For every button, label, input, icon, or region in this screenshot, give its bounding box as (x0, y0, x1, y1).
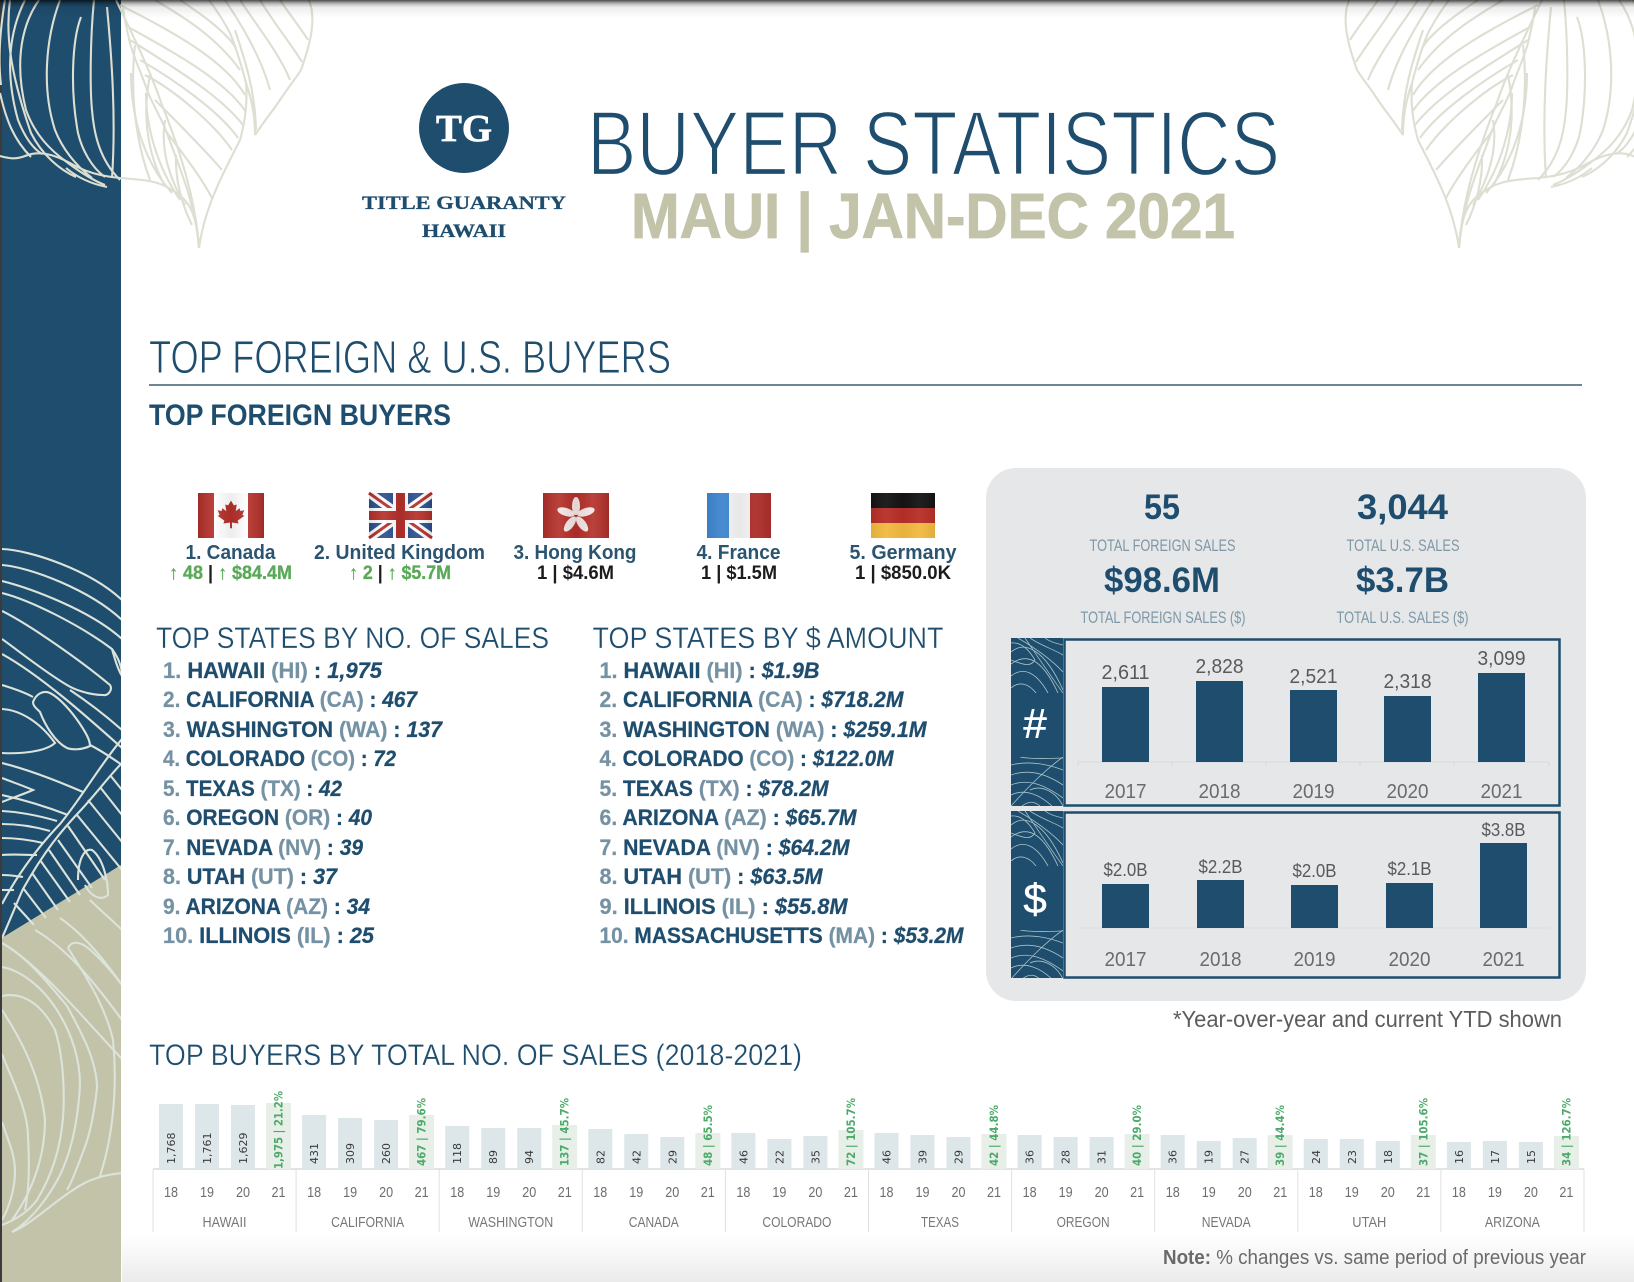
group: Canada: 19 (629, 1184, 643, 1201)
group: Colorado: 19 (772, 1184, 786, 1201)
group: Texas: 21 (987, 1184, 1001, 1201)
chart: number of sales by year: 2,521 (1290, 666, 1338, 688)
group: Utah: 21 (1416, 1184, 1430, 1201)
group: Colorado (725, 1098, 863, 1232)
chart: dollar volume by year: 2019 (1294, 949, 1336, 971)
group: Utah: 20 (1381, 1184, 1395, 1201)
chart: dollar volume by year: $2.0B (1104, 860, 1148, 880)
chart: dollar volume by year: $2.2B (1198, 857, 1242, 877)
flag: United Kingdom (369, 493, 432, 538)
group: Canada: 48 | 65.5% (701, 1105, 715, 1166)
group: California: 467 | 79.6% (415, 1098, 429, 1166)
group: Utah: 24 (1310, 1150, 1323, 1164)
group: Washington: 19 (486, 1184, 500, 1201)
group: Texas: 42 | 44.8% (987, 1105, 1001, 1166)
group: California: 431 (308, 1143, 321, 1164)
group: Arizona: 19 (1488, 1184, 1502, 1201)
list: top states by number of sales: 3. WASHINGTON (WA) : 137 (163, 717, 444, 742)
totals: TOTAL FOREIGN SALES (1090, 537, 1236, 555)
group: Utah: 19 (1345, 1184, 1359, 1201)
group: Nevada: 20 (1238, 1184, 1252, 1201)
chart: number of sales by year: 3,099 (1478, 648, 1526, 670)
group: Utah (1298, 1098, 1436, 1232)
chart: dollar volume by year: $2.1B (1388, 859, 1432, 879)
foreign buyer labels: 3. Hong Kong (514, 542, 636, 564)
group: Washington: 118 (451, 1143, 464, 1164)
group: Oregon: 28 (1060, 1150, 1073, 1164)
group: Texas (868, 1105, 1006, 1232)
group: Hawaii: 1,761 (201, 1132, 214, 1164)
group: Canada: 29 (666, 1150, 679, 1164)
list: top states by number of sales: 5. TEXAS (TX) : 42 (163, 776, 343, 801)
totals: TOTAL U.S. SALES ($) (1336, 609, 1468, 627)
totals: 55 (1144, 488, 1180, 527)
foreign buyer labels: ↑ 48 | ↑ $84.4M (169, 563, 292, 584)
group: Washington: 20 (522, 1184, 536, 1201)
list: top states by dollar amount: 6. ARIZONA (AZ) : $65.7M (600, 805, 857, 830)
chart: dollar volume by year (1011, 811, 1560, 979)
chart: dollar volume by year: $ (1023, 875, 1047, 922)
list: top states by number of sales: 8. UTAH (UT) : 37 (163, 864, 339, 889)
chart: dollar volume by year: 2020 (1388, 949, 1430, 971)
chart: number of sales by year: 2017 (1104, 781, 1146, 803)
list: top states by dollar amount: 3. WASHINGTON (WA) : $259.1M (600, 717, 927, 742)
group: Oregon: 31 (1096, 1150, 1109, 1164)
list: top states by number of sales: 9. ARIZONA (AZ) : 34 (163, 894, 370, 919)
group: Nevada (1155, 1105, 1293, 1232)
chart: number of sales by year: 2021 (1480, 781, 1522, 803)
group: Nevada: NEVADA (1202, 1214, 1251, 1231)
footnote: year over year: *Year-over-year and current YTD shown (1173, 1006, 1562, 1032)
group: Colorado: 18 (736, 1184, 750, 1201)
flag: France (707, 493, 771, 538)
group: Texas: 19 (916, 1184, 930, 1201)
group: Nevada: 21 (1273, 1184, 1287, 1201)
sidebar leaf art (2, 549, 122, 1232)
group: California: 309 (344, 1143, 357, 1164)
logo (362, 83, 566, 242)
foreign buyer labels: 5. Germany (850, 542, 957, 564)
group: Oregon: 36 (1024, 1150, 1037, 1164)
totals: 3,044 (1357, 488, 1449, 527)
group: Hawaii: 1,629 (237, 1132, 250, 1164)
list: top states by number of sales: 10. ILLINOIS (IL) : 25 (163, 923, 375, 948)
bottom fade (122, 1235, 1634, 1282)
group: California: CALIFORNIA (331, 1214, 404, 1231)
logo: TITLE GUARANTY (362, 193, 566, 214)
chart: number of sales by year: 2018 (1198, 781, 1240, 803)
group: Colorado: 35 (809, 1150, 822, 1164)
group: Nevada: 18 (1166, 1184, 1180, 1201)
group: Texas: 18 (880, 1184, 894, 1201)
totals: TOTAL FOREIGN SALES ($) (1080, 609, 1246, 627)
chart: number of sales by year: 2020 (1386, 781, 1428, 803)
group: Washington (439, 1098, 577, 1232)
group: Oregon: 18 (1023, 1184, 1037, 1201)
bar chart: top buyers by total sales (153, 1091, 1584, 1232)
chart: number of sales by year: 2,318 (1384, 671, 1432, 693)
group: Oregon (1012, 1105, 1150, 1232)
foreign buyer labels: 2. United Kingdom (314, 542, 485, 564)
group: Nevada: 19 (1202, 1184, 1216, 1201)
logo: HAWAII (422, 221, 506, 242)
leaf: top left (0, 0, 312, 248)
group: California: 21 (415, 1184, 429, 1201)
group: Oregon: 19 (1059, 1184, 1073, 1201)
group: Oregon: OREGON (1057, 1214, 1110, 1231)
group: Oregon: 20 (1095, 1184, 1109, 1201)
group: California (296, 1098, 434, 1232)
group: Washington: 89 (487, 1150, 500, 1164)
list: top states by dollar amount: 7. NEVADA (NV) : $64.2M (600, 835, 850, 860)
list: top states by dollar amount: 9. ILLINOIS (IL) : $55.8M (600, 894, 848, 919)
group: Colorado: 46 (737, 1150, 750, 1164)
group: Hawaii: 1,975 | 21.2% (272, 1091, 286, 1169)
group: Arizona: 18 (1452, 1184, 1466, 1201)
group: Hawaii: 21 (272, 1184, 286, 1201)
group: Nevada: 19 (1203, 1150, 1216, 1164)
group: Nevada: 27 (1239, 1150, 1252, 1164)
group: Canada: 18 (593, 1184, 607, 1201)
heading: top buyers: TOP BUYERS BY TOTAL NO. OF SALES (2018-2021) (149, 1039, 802, 1072)
subheading: top foreign buyers: TOP FOREIGN BUYERS (149, 399, 451, 432)
list: top states by dollar amount: 10. MASSACHUSETTS (MA) : $53.2M (600, 923, 964, 948)
list: top states by number of sales: 7. NEVADA (NV) : 39 (163, 835, 364, 860)
note: Note: % changes vs. same period of previous year (1163, 1247, 1586, 1269)
subtitle: MAUI | JAN-DEC 2021 (631, 180, 1235, 253)
section rule (149, 384, 1582, 386)
section heading: TOP FOREIGN & U.S. BUYERS (149, 331, 671, 383)
list: top states by number of sales: 1. HAWAII (HI) : 1,975 (163, 658, 383, 683)
chart: dollar volume by year: $3.8B (1482, 820, 1526, 840)
top shadow (0, 0, 1634, 18)
totals (1080, 488, 1468, 627)
group: Washington: 18 (450, 1184, 464, 1201)
list: top states by number of sales: TOP STATES BY NO. OF SALES (156, 622, 549, 655)
group: Arizona: 15 (1525, 1150, 1538, 1164)
logo: TG (436, 108, 492, 150)
list: top states by number of sales: 4. COLORADO (CO) : 72 (163, 746, 397, 771)
foreign buyer labels: 1 | $850.0K (855, 563, 951, 584)
group: Hawaii: 19 (200, 1184, 214, 1201)
group: Washington: 94 (523, 1150, 536, 1164)
group: Texas: TEXAS (921, 1214, 959, 1231)
totals: $98.6M (1104, 561, 1220, 600)
group: Arizona: 20 (1524, 1184, 1538, 1201)
group: California: 18 (307, 1184, 321, 1201)
leaf: top right (1346, 0, 1634, 248)
list: top states by dollar amount: 4. COLORADO (CO) : $122.0M (600, 746, 894, 771)
group: Colorado: 72 | 105.7% (844, 1098, 858, 1166)
group: Arizona: 21 (1559, 1184, 1573, 1201)
list: top states by dollar amount: 5. TEXAS (TX) : $78.2M (600, 776, 829, 801)
group: Canada: CANADA (629, 1214, 679, 1231)
group: Hawaii (153, 1091, 291, 1232)
chart: dollar volume by year: $2.0B (1292, 861, 1336, 881)
list: top states by dollar amount (592, 622, 964, 948)
list: top states by dollar amount: TOP STATES BY $ AMOUNT (592, 622, 944, 655)
group: Hawaii: 18 (164, 1184, 178, 1201)
panel: totals and yearly charts (986, 468, 1586, 1001)
group: Washington: 137 | 45.7% (558, 1098, 572, 1166)
list: top states by dollar amount: 8. UTAH (UT) : $63.5M (600, 864, 823, 889)
group: California: 260 (380, 1143, 393, 1164)
flag: Canada (198, 493, 264, 538)
list: top states by number of sales: 6. OREGON (OR) : 40 (163, 805, 373, 830)
chart: dollar volume by year: 2018 (1200, 949, 1242, 971)
foreign buyer labels: 1. Canada (186, 542, 276, 564)
group: Texas: 39 (916, 1150, 930, 1164)
group: Oregon: 21 (1130, 1184, 1144, 1201)
list: top states by number of sales (156, 622, 549, 948)
group: Arizona: ARIZONA (1485, 1214, 1540, 1231)
group: Arizona (1441, 1098, 1579, 1232)
flag: Germany (871, 493, 935, 538)
group: Texas: 29 (952, 1150, 966, 1164)
group: Arizona: 16 (1453, 1150, 1466, 1164)
group: Canada: 42 (630, 1150, 643, 1164)
chart: dollar volume by year: 2021 (1482, 949, 1524, 971)
chart: number of sales by year: 2,611 (1102, 662, 1150, 684)
group: Nevada: 36 (1167, 1150, 1180, 1164)
group: Washington: WASHINGTON (468, 1214, 553, 1231)
group: Utah: 23 (1346, 1150, 1359, 1164)
list: top states by number of sales: 2. CALIFORNIA (CA) : 467 (163, 687, 419, 712)
group: Canada: 21 (701, 1184, 715, 1201)
chart: number of sales by year: 2019 (1292, 781, 1334, 803)
chart: number of sales by year (1011, 638, 1560, 806)
group: Washington: 21 (558, 1184, 572, 1201)
list: top states by dollar amount: 1. HAWAII (HI) : $1.9B (600, 658, 820, 683)
foreign buyer labels (169, 542, 957, 584)
chart: number of sales by year: # (1023, 700, 1047, 747)
foreign buyer labels: 4. France (696, 542, 780, 564)
group: Colorado: 22 (773, 1150, 786, 1164)
group: Hawaii: HAWAII (202, 1214, 246, 1231)
group: Oregon: 40 | 29.0% (1130, 1105, 1144, 1166)
foreign buyer labels: 1 | $4.6M (537, 563, 614, 584)
group: Arizona: 17 (1489, 1150, 1502, 1164)
flag: Hong Kong (543, 493, 609, 538)
group: Colorado: COLORADO (762, 1214, 831, 1231)
totals: $3.7B (1356, 561, 1449, 600)
group: Utah: 18 (1382, 1150, 1395, 1164)
group: Canada: 20 (665, 1184, 679, 1201)
list: top states by dollar amount: 2. CALIFORNIA (CA) : $718.2M (600, 687, 904, 712)
group: Hawaii: 20 (236, 1184, 250, 1201)
group: Texas: 46 (880, 1150, 894, 1164)
chart: dollar volume by year: 2017 (1104, 949, 1146, 971)
group: Nevada: 39 | 44.4% (1273, 1105, 1287, 1166)
group: Utah: 37 | 105.6% (1416, 1098, 1430, 1166)
group: Colorado: 21 (844, 1184, 858, 1201)
group: Hawaii: 1,768 (165, 1132, 178, 1164)
group: Texas: 20 (952, 1184, 966, 1201)
foreign buyer labels: 1 | $1.5M (701, 563, 777, 584)
group: Arizona: 34 | 126.7% (1559, 1098, 1573, 1166)
title: BUYER STATISTICS (587, 93, 1280, 195)
sidebar band (0, 0, 121, 1282)
foreign buyer labels: ↑ 2 | ↑ $5.7M (349, 563, 451, 584)
group: Canada: 82 (594, 1150, 607, 1164)
group: California: 20 (379, 1184, 393, 1201)
totals: TOTAL U.S. SALES (1346, 537, 1460, 555)
group: Utah: 18 (1309, 1184, 1323, 1201)
group: California: 19 (343, 1184, 357, 1201)
group: Canada (582, 1105, 720, 1232)
chart: number of sales by year: 2,828 (1196, 656, 1244, 678)
group: Colorado: 20 (808, 1184, 822, 1201)
group: Utah: UTAH (1352, 1214, 1386, 1231)
